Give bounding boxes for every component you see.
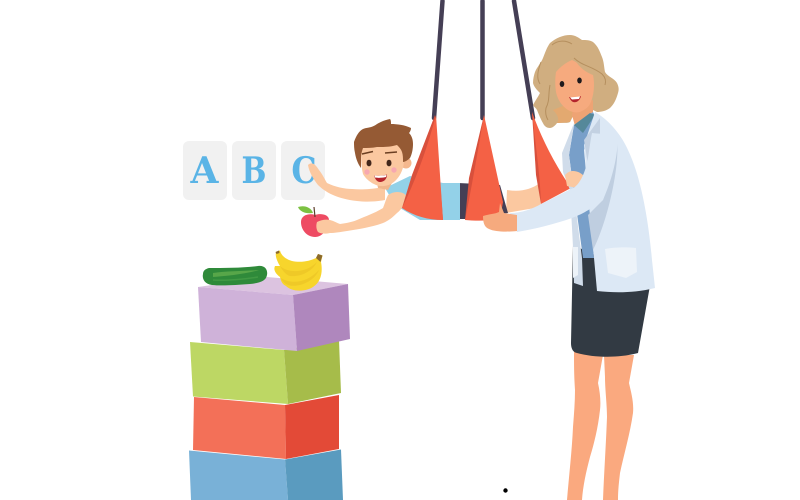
blue block	[189, 450, 343, 500]
boy lower arm holding apple	[316, 192, 407, 234]
therapist arm	[510, 133, 618, 232]
blue shirt	[569, 112, 596, 258]
therapist hand on sling	[483, 203, 517, 232]
sling fabric	[402, 112, 571, 221]
bananas	[274, 250, 322, 291]
boy shirt	[385, 176, 460, 220]
letter cards ABC	[183, 141, 325, 200]
hair	[533, 35, 619, 128]
skirt	[571, 245, 651, 357]
sling panel left	[402, 115, 443, 220]
therapist hand on boy	[565, 171, 585, 188]
neck and face	[555, 60, 594, 126]
legs	[567, 350, 634, 500]
card B: B	[242, 149, 266, 192]
apple	[298, 206, 329, 237]
green block	[190, 340, 341, 404]
lab coat	[562, 112, 655, 292]
boy head	[354, 119, 413, 190]
red block	[193, 395, 339, 459]
therapist	[483, 35, 655, 500]
card B	[232, 141, 276, 200]
stacked blocks	[189, 277, 350, 500]
cucumber	[203, 266, 267, 285]
card C: C	[291, 149, 317, 191]
card C	[281, 141, 325, 200]
card A: A	[190, 150, 220, 192]
boy	[298, 119, 541, 237]
sling panel middle	[465, 115, 503, 221]
straps	[434, 1, 533, 118]
boy upper arm reaching to C	[308, 163, 385, 202]
card A	[183, 141, 227, 200]
small dot	[503, 488, 508, 493]
sling panel right	[532, 112, 571, 204]
boy legs and shorts	[458, 183, 541, 219]
purple block	[198, 277, 350, 351]
